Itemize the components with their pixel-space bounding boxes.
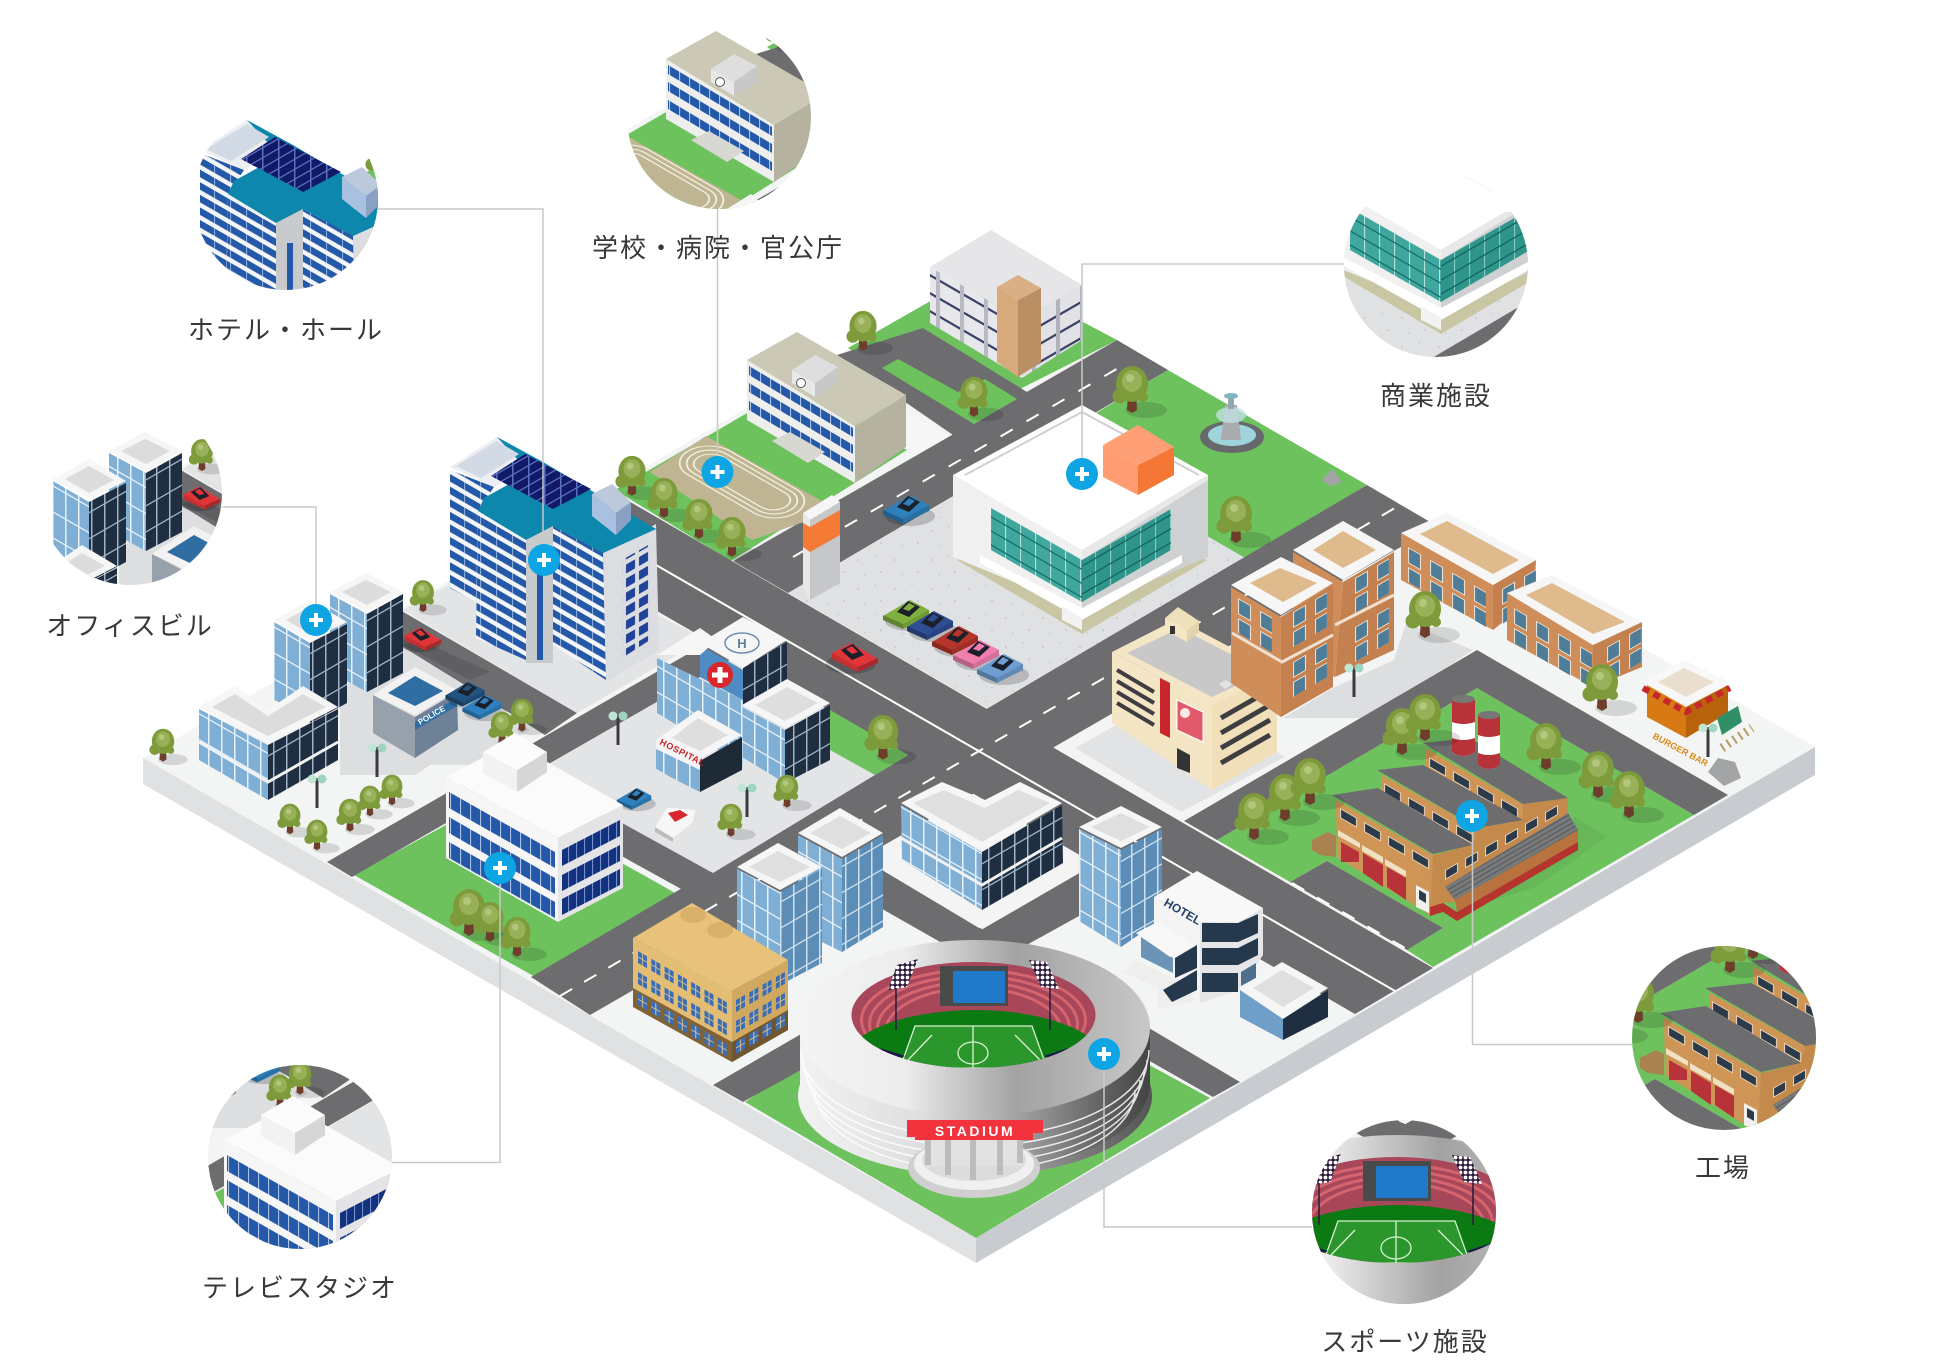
hospital grounds: trees, lamp, car, ambulance: [617, 715, 916, 842]
thumbnail: school, hospital, government office: [628, 31, 811, 209]
stadium: STADIUM: [935, 1123, 1015, 1139]
thumbnail: office building: [52, 432, 222, 585]
commercial building: [953, 405, 1208, 634]
road markings: [560, 363, 1405, 996]
TV studio building: [446, 733, 623, 922]
L-shaped office, centre: [901, 782, 1063, 910]
label: hotel and hall: ホテル・ホール: [188, 315, 384, 345]
thumbnail: TV studio: [208, 1065, 392, 1249]
tall glass tower: [1079, 806, 1162, 947]
hotel tower with solar roof: [450, 437, 659, 682]
thumbnail: commercial facility: [1344, 176, 1528, 357]
connector lines: [222, 209, 1632, 1227]
office towers: [274, 573, 403, 723]
label: factory: 工場: [1695, 1153, 1751, 1183]
label: TV studio: テレビスタジオ: [202, 1273, 398, 1303]
marker: TV studio: [484, 852, 516, 884]
pavement over roads: [403, 359, 1080, 928]
trees: TV studio lawn: [450, 889, 547, 961]
cars by police: [445, 682, 507, 721]
isometric city map: [143, 230, 1815, 1263]
tree by hotel: [410, 580, 447, 615]
label: commercial facility: 商業施設: [1380, 381, 1492, 411]
marker: factory: [1456, 800, 1488, 832]
trees and lamps: office plaza: [149, 699, 628, 853]
beige department building: [1112, 607, 1277, 790]
thumbnail: sports facility: [1312, 1120, 1496, 1304]
trees: school lawn: [615, 456, 762, 561]
police station: POLICE: [416, 704, 447, 727]
marker: school: [702, 456, 734, 488]
orange pylon: [803, 495, 840, 600]
trees: factory lawn: [1234, 694, 1664, 845]
ground slab: [143, 270, 1815, 1263]
roads: [327, 328, 1728, 1102]
label: sports facility: スポーツ施設: [1321, 1327, 1489, 1357]
hospital: HOSPITAL: [658, 737, 707, 768]
factory: [1312, 695, 1607, 921]
tree and lamp by brick apartments: [1344, 591, 1637, 716]
small HOTEL building: HOTEL: [1162, 895, 1204, 928]
burger bar: BURGER BAR: [1651, 731, 1710, 769]
twin towers, centre: [737, 808, 883, 985]
marker: hotel: [528, 544, 560, 576]
rock: [1322, 469, 1342, 486]
small shop: [1239, 962, 1328, 1040]
marker: stadium: [1088, 1038, 1120, 1070]
car: blue on road: [883, 495, 935, 526]
stadium: [798, 940, 1152, 1198]
lawns and pavement blocks: [340, 270, 1694, 1238]
apartment block: [930, 230, 1082, 378]
fountain: [1200, 393, 1264, 453]
brick apartments: [1231, 513, 1642, 717]
label: office building: オフィスビル: [46, 611, 214, 641]
marker: commercial: [1066, 458, 1098, 490]
school: [650, 332, 906, 540]
police station: [373, 667, 458, 758]
hospital: [656, 617, 830, 792]
small HOTEL building: [1123, 871, 1263, 1010]
burger bar: [1643, 660, 1752, 786]
parked cars: [826, 600, 1029, 685]
thumbnail: factory: [1632, 946, 1816, 1130]
road shadow and red car: [400, 627, 490, 680]
marker: office: [300, 604, 332, 636]
label: school, hospital, government office: 学校・病院・官公庁: [592, 233, 844, 263]
hospital: H: [737, 636, 747, 651]
yellow building: [633, 903, 788, 1062]
L-shaped office: [199, 686, 338, 800]
thumbnail: hotel and hall: [200, 120, 378, 290]
trees: upper lawns: [846, 311, 1271, 548]
